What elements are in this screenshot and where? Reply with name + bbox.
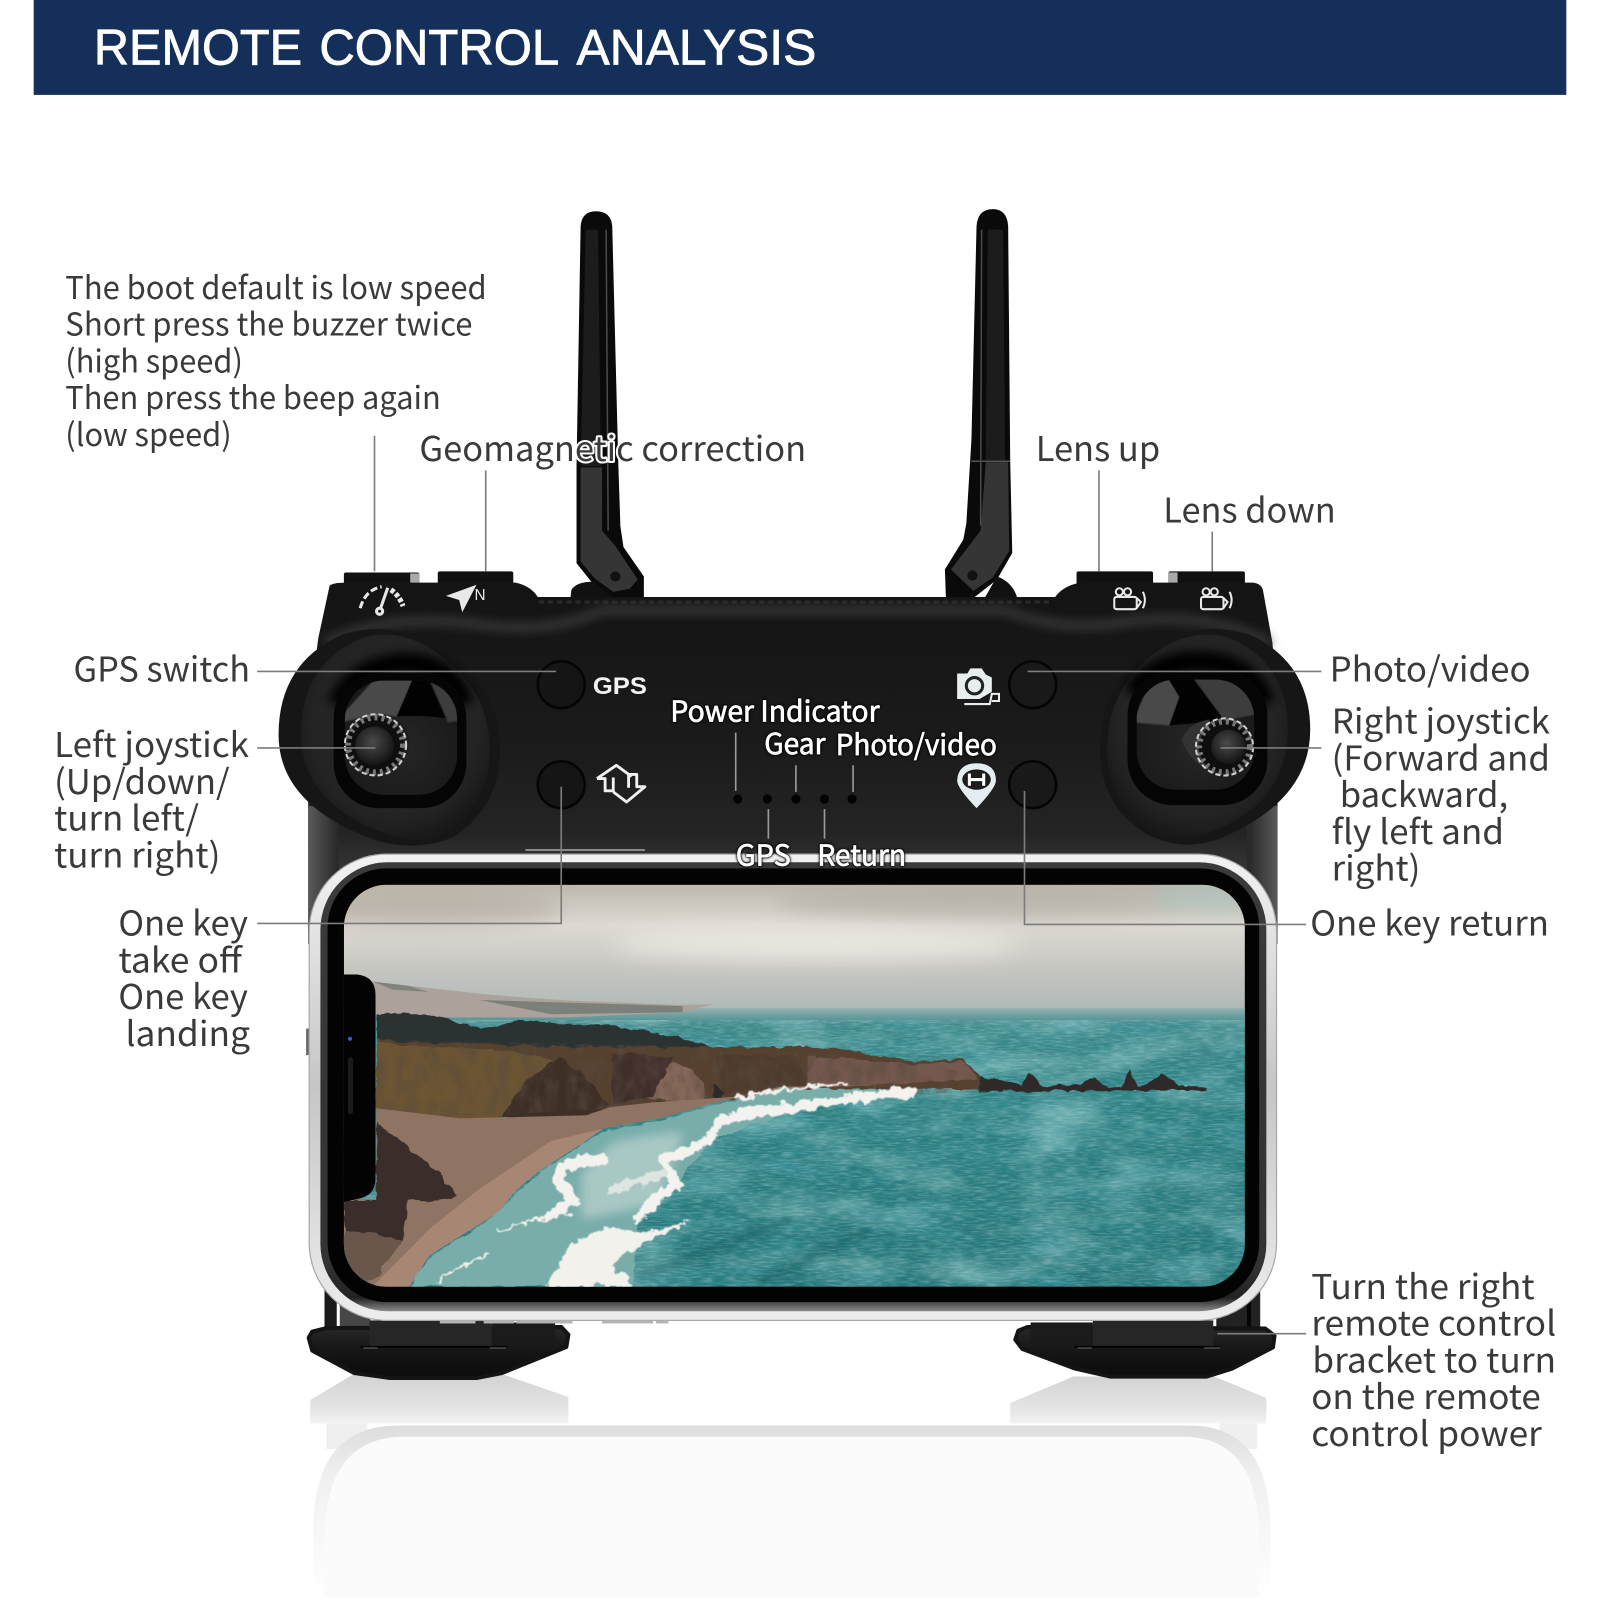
label: one key take off: [118, 896, 250, 1056]
left joystick socket: [334, 673, 466, 808]
title: [94, 19, 816, 75]
beach: [344, 1085, 900, 1287]
label: speed note: Short press the buzzer twice: [65, 300, 472, 346]
label: right joystick: fly left and: [1332, 804, 1504, 854]
label: right joystick: backward,: [1340, 767, 1508, 817]
label: right joystick: [1332, 694, 1550, 891]
label: one key take off: landing: [126, 1006, 250, 1056]
label: one key return: One key return: [1310, 896, 1549, 946]
notch: [344, 974, 376, 1202]
indicator label: gear: Gear: [764, 722, 826, 763]
leader lines: [257, 436, 1321, 1334]
label: one key take off: One key: [118, 896, 248, 946]
label: bracket power: on the remote: [1311, 1369, 1541, 1419]
indicator label: GPS: GPS: [736, 833, 791, 874]
right joystick socket: [1128, 670, 1267, 805]
icon: home return pin: [957, 763, 996, 808]
bracket: left: [309, 1288, 568, 1378]
label: bracket power: Turn the right: [1311, 1259, 1535, 1309]
label: speed note: The boot default is low speed: [65, 263, 487, 309]
photo: coastal landscape: [296, 884, 1276, 1287]
label: one key take off: One key: [118, 969, 248, 1019]
right joystick stick: [1182, 718, 1253, 776]
bracket: right: [1015, 1288, 1274, 1377]
phone bottom port strip: [440, 1320, 668, 1323]
offshore rocks: [656, 1069, 1207, 1102]
label: right joystick: (Forward and: [1332, 730, 1550, 780]
indicator label: return: Return: [817, 833, 906, 874]
label: right joystick: Right joystick: [1332, 694, 1550, 744]
icon: camera: [957, 668, 999, 704]
indicator label: photo/video: Photo/video: [836, 723, 997, 764]
left grip: [279, 629, 500, 846]
label: left joystick: (Up/down/: [54, 754, 230, 804]
top port strip: [526, 849, 645, 851]
button: GPS: [538, 661, 585, 708]
label: left joystick: Left joystick: [54, 717, 249, 767]
antenna: right: [945, 209, 1012, 598]
sea: [344, 1008, 1245, 1287]
label: geomagnetic correction: Geomagnetic correction: [419, 421, 806, 471]
waves foam: [439, 1084, 910, 1287]
button: one key return: [1009, 761, 1056, 808]
label: GPS switch: GPS switch: [73, 642, 250, 692]
icon: lens down: [1201, 588, 1232, 609]
dark foreground rock: [344, 1121, 457, 1287]
earpiece: [348, 1057, 353, 1114]
label: left joystick: turn left/: [54, 791, 199, 841]
phone silver frame: [309, 854, 1277, 1320]
label: speed note: (low speed): [65, 410, 232, 456]
main shell: [308, 583, 1278, 944]
label: left joystick: turn right): [54, 827, 220, 877]
label: lens down: Lens down: [1163, 482, 1336, 532]
label: one key take off: take off: [118, 932, 244, 982]
phone side buttons: [306, 1029, 310, 1055]
antenna bases: [570, 577, 1017, 598]
title: CONTROL: [319, 19, 559, 75]
indicator lights: [733, 794, 857, 804]
label: speed note: Then press the beep again: [65, 373, 441, 419]
icon: compass north: [446, 585, 486, 612]
label: bracket power: bracket to turn: [1312, 1332, 1556, 1382]
icon: GPS text: GPS: [593, 673, 647, 700]
phone: [296, 854, 1277, 1323]
label: bracket power: remote control: [1311, 1296, 1556, 1346]
header banner: [34, 0, 1566, 95]
title: REMOTE: [94, 19, 302, 75]
label: speed note: (high speed): [65, 336, 243, 382]
right grip: [1100, 629, 1310, 845]
title: ANALYSIS: [577, 19, 816, 75]
icon: take off and landing arrows: [597, 765, 645, 802]
remote controller body: [279, 571, 1310, 944]
tree line: [377, 1013, 720, 1052]
shoulder buttons: [344, 571, 1245, 587]
front camera dot: [348, 1037, 352, 1041]
cliffs: [377, 1040, 1010, 1120]
icon: compass north: N: [474, 587, 486, 604]
label: bracket power: control power: [1311, 1406, 1543, 1456]
shoulder highlight: [324, 610, 1270, 643]
button: one key take off: [538, 761, 585, 808]
label: photo/video: Photo/video: [1330, 642, 1531, 692]
label: right joystick: right): [1332, 841, 1420, 891]
icon: speed gauge: [360, 587, 403, 614]
label: left joystick: [54, 717, 249, 877]
indicator label: power indicator: Power Indicator: [670, 689, 881, 730]
antenna: left: [577, 211, 644, 600]
shallow water: [409, 1089, 910, 1287]
left joystick stick: [345, 714, 409, 776]
label: speed note: [65, 263, 487, 456]
reflection of remote below: [310, 1374, 1270, 1597]
distant headland: [372, 982, 713, 1017]
dark wave crests: [638, 1219, 867, 1284]
icon: lens up: [1114, 588, 1145, 609]
label: bracket power: [1311, 1259, 1556, 1456]
label: lens up: Lens up: [1036, 421, 1160, 471]
button: photo/video: [1009, 661, 1056, 708]
